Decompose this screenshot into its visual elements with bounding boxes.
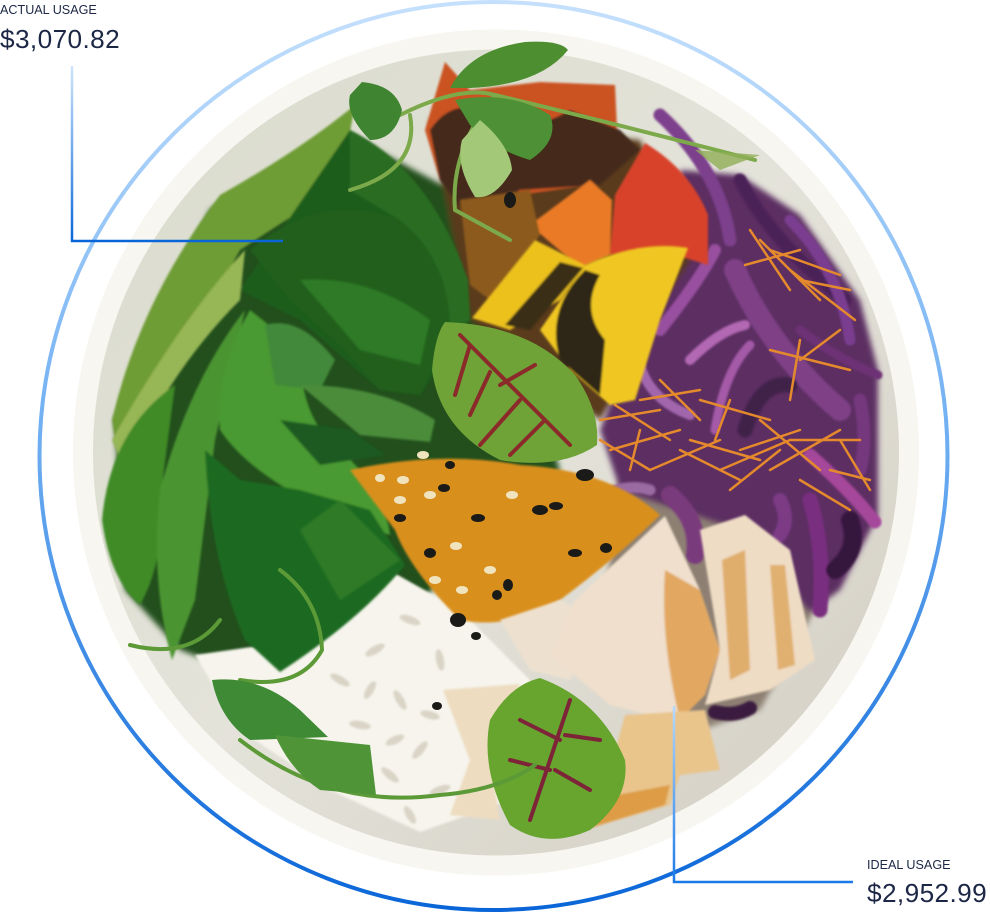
grilled chicken [443,515,815,828]
connector line: actual usage [72,66,283,241]
pea shoots bottom [130,570,535,798]
food contents [102,42,878,839]
connector line: ideal usage [674,706,853,882]
value: ideal usage: $2,952.99 [867,878,987,908]
spinach leaves [102,105,470,672]
food shadow base [115,120,820,730]
red-veined leaf upper [432,322,597,463]
sesame seeds [375,451,518,594]
pea shoots top [349,42,760,240]
red-veined leaf lower [488,678,626,839]
bowl [73,30,919,876]
sauce [350,459,660,622]
label: actual usage: ACTUAL USAGE [0,3,97,17]
orange saffron threads [600,230,870,510]
rice [195,565,530,832]
value: actual usage: $3,070.82 [0,24,120,54]
roasted yellow pepper [472,240,688,405]
roasted red pepper [425,62,708,300]
label: ideal usage: IDEAL USAGE [867,858,951,872]
purple cabbage strands [574,115,878,714]
cabbage base [600,170,878,612]
